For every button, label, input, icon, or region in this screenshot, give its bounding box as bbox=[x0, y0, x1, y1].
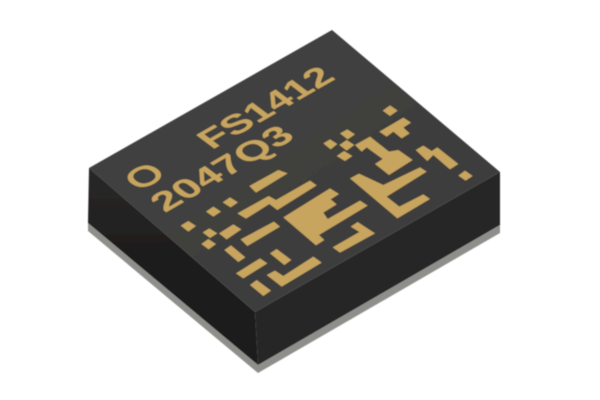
gold pads right group bbox=[323, 105, 473, 218]
chip top face bbox=[89, 30, 500, 312]
part number text: FS1412 bbox=[188, 60, 342, 154]
gold pads left group bbox=[181, 170, 375, 296]
pin one mark: O bbox=[116, 157, 173, 195]
date code text: 2047Q3 bbox=[141, 120, 303, 218]
chip left side face bbox=[88, 168, 258, 365]
chip right side face bbox=[255, 172, 500, 365]
chip base strip bbox=[88, 223, 500, 373]
